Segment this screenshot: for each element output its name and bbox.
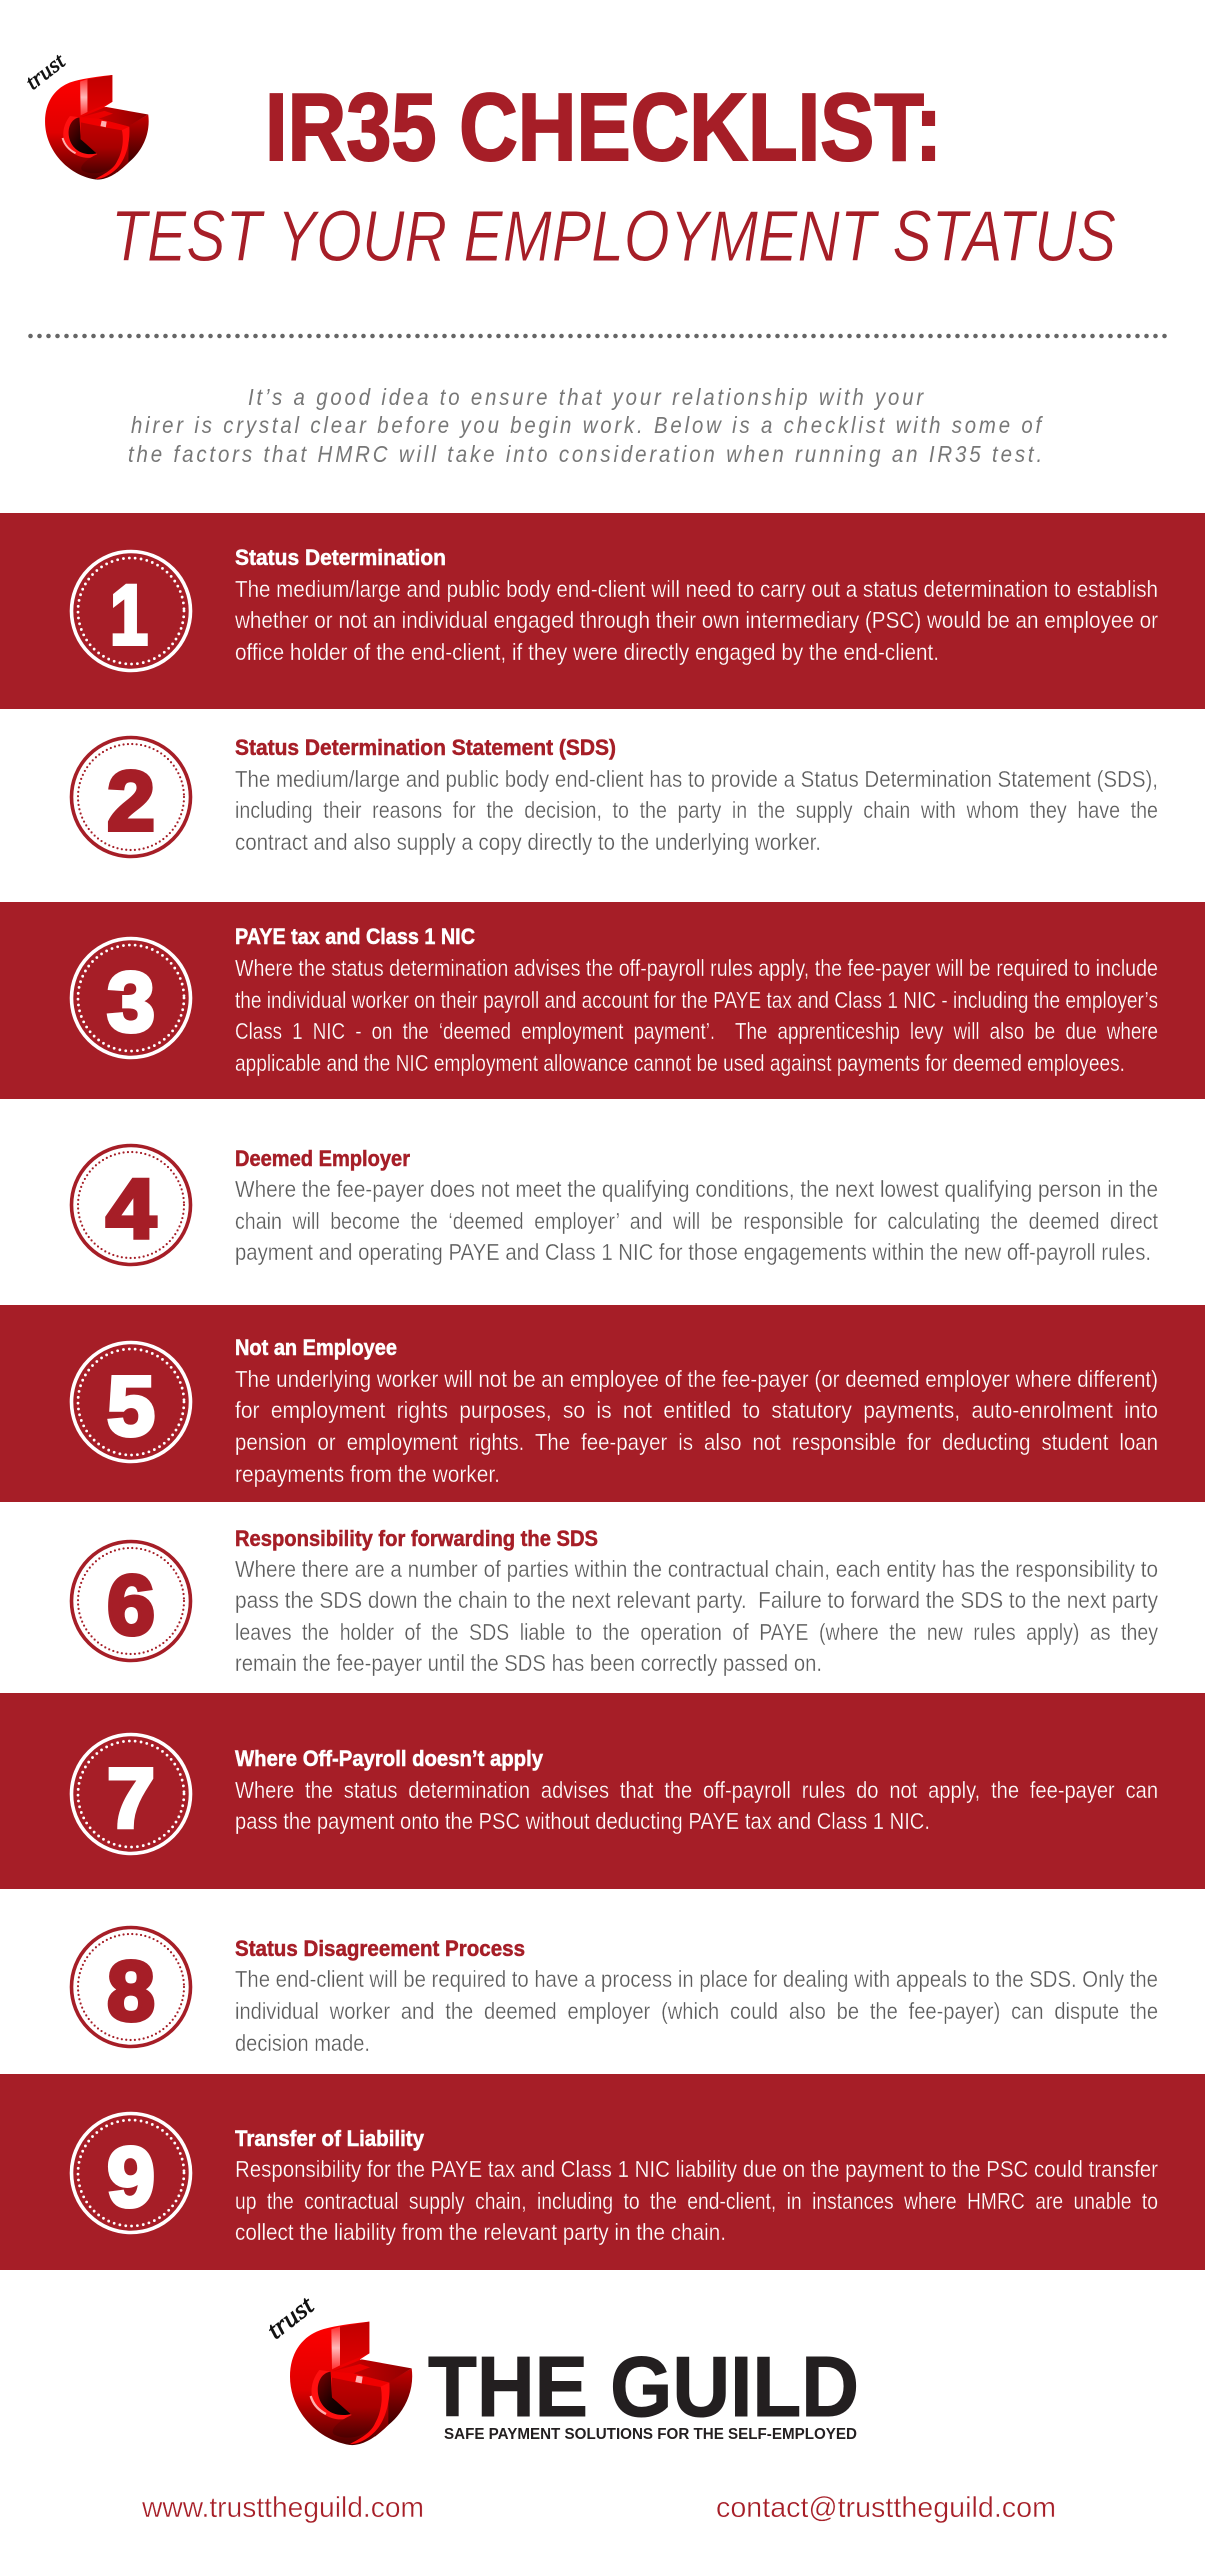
body text: remain the fee-payer until the SDS has been correctly passed on. [235,1650,822,1676]
body text [235,1966,1158,2056]
number badge 1 [72,552,190,670]
body text [235,955,1158,1076]
intro text: It’s a good idea to ensure that your relationship with your [248,384,926,410]
heading: Status Determination [235,545,446,570]
number badge 1: 1 [110,568,148,662]
brand name: The Guild: THE GUILD [428,2340,859,2435]
number badge 8: 8 [107,1944,155,2038]
body text [235,1556,1158,1676]
panel: item 6 responsibility for forwarding the SDS [72,1526,1158,1676]
title: IR35 Checklist: IR35 CHECKLIST: [265,74,942,181]
heading: Status Determination Statement (SDS) [235,735,616,760]
panel: item 4 deemed employer [72,1146,1159,1265]
body text [235,1366,1158,1487]
intro text [128,384,1045,467]
body text [235,1176,1159,1265]
trust wordmark: trust [261,2290,320,2345]
heading: Responsibility for forwarding the SDS [235,1526,598,1551]
panel: item 2 status determination statement [72,735,1158,856]
body text: pass the payment onto the PSC without deducting PAYE tax and Class 1 NIC. [235,1808,930,1834]
number badge 7: 7 [107,1751,155,1845]
body text [235,766,1158,855]
body text: repayments from the worker. [235,1461,500,1487]
number badge 2: 2 [107,754,155,848]
number badge 9: 9 [107,2130,155,2224]
number badge 4 [72,1146,190,1264]
panel: item 1 status determination [0,513,1205,709]
heading: Status Disagreement Process [235,1936,525,1961]
body text: decision made. [235,2030,370,2056]
body text [235,1777,1158,1834]
heading: Where Off-Payroll doesn’t apply [235,1746,544,1771]
number badge 5 [72,1342,190,1462]
heading: PAYE tax and Class 1 NIC [235,924,475,949]
panel: item 3 PAYE tax and class 1 NIC [0,902,1205,1099]
number badge 5: 5 [107,1359,155,1453]
website link: www.trusttheguild.com [141,2492,424,2524]
heading: Transfer of Liability [235,2126,425,2151]
body text [235,2156,1158,2245]
tagline: SAFE PAYMENT SOLUTIONS FOR THE SELF-EMPLOYED [444,2426,857,2443]
number badge 7 [72,1734,190,1854]
number badge 3: 3 [107,955,155,1049]
number badge 2 [72,738,190,856]
body text: contract and also supply a copy directly to the underlying worker. [235,829,821,855]
intro text: the factors that HMRC will take into consideration when running an IR35 test. [128,441,1045,467]
number badge 6: 6 [107,1558,155,1652]
number badge 8 [72,1928,190,2046]
panel: item 9 transfer of liability [0,2074,1205,2270]
heading: Not an Employee [235,1335,397,1360]
trust wordmark: trust [20,48,70,94]
body text [234,576,1158,665]
body text: collect the liability from the relevant party in the chain. [235,2219,726,2245]
email link: contact@trusttheguild.com [716,2492,1056,2524]
heading: Deemed Employer [235,1146,410,1171]
panel: item 7 where off-payroll doesn't apply [0,1693,1205,1889]
logo: trust G top left [20,48,149,180]
number badge 3 [72,938,190,1058]
panel: item 5 not an employee [0,1305,1205,1502]
body text: office holder of the end-client, if they were directly engaged by the end-client. [235,639,939,665]
number badge 6 [72,1542,190,1660]
number badge 9 [72,2114,190,2232]
number badge 4: 4 [106,1162,156,1256]
panel: item 8 status disagreement process [72,1928,1158,2056]
intro text: hirer is crystal clear before you begin work. Below is a checklist with some of [131,412,1044,438]
logo: trust G footer [261,2290,412,2445]
